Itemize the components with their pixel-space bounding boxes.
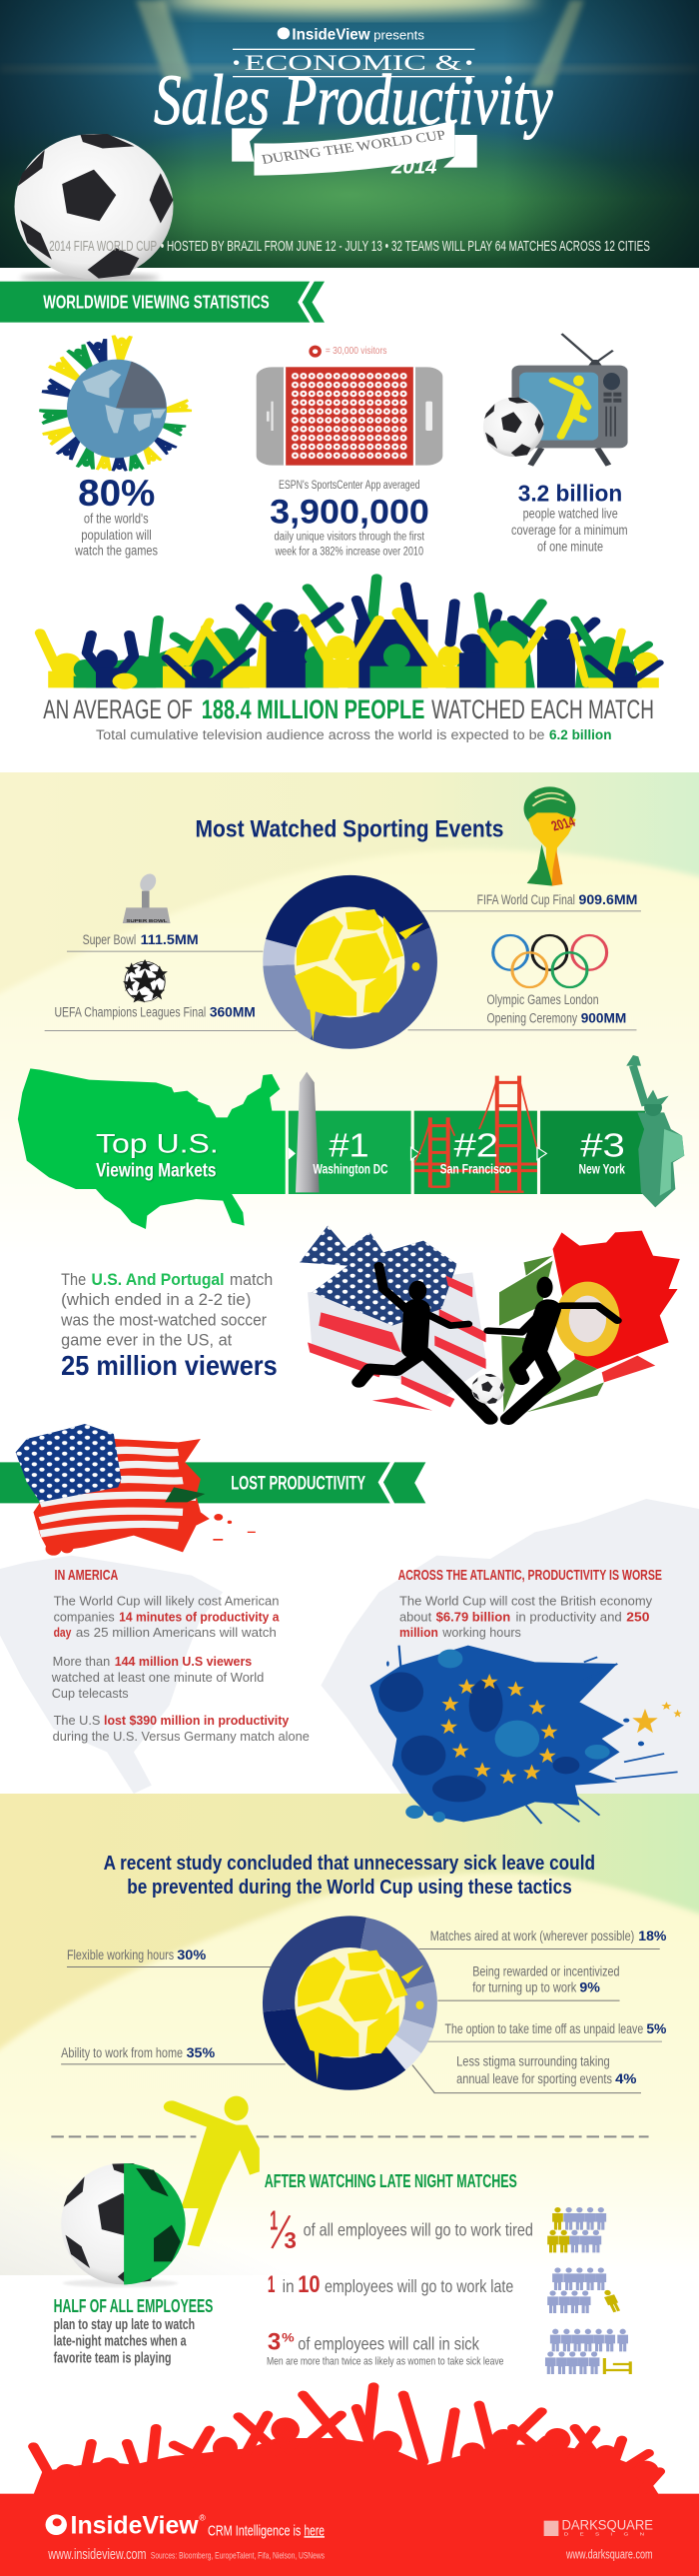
stat: 3.2 billion: 3.2 billion — [518, 481, 622, 507]
callout text: U.S. and Portugal match: was the most-watched soccer — [60, 1311, 267, 1330]
dashed divider — [51, 2133, 649, 2139]
panel: top U.S. viewing markets — [18, 1055, 684, 1419]
label: FIFA World Cup Final: FIFA World Cup Final — [477, 891, 575, 907]
label: flexible working hours: Flexible working hours — [67, 1946, 174, 1962]
panel: sick leave tactics — [61, 1852, 667, 2093]
label: matches aired at work: 18% — [638, 1928, 667, 1943]
label: Olympic Games: Olympic Games London — [487, 991, 599, 1007]
stat: one third tired: 1 — [270, 2205, 278, 2236]
icon: ball between players — [471, 1374, 504, 1404]
map label: Viewing Markets — [96, 1159, 217, 1181]
headline: 188.4 million viewers: AN AVERAGE OF — [43, 693, 193, 724]
icon: half green soccer ball — [61, 2163, 186, 2287]
stat: half of all employees: plan to stay up late to watch — [54, 2315, 195, 2332]
heading — [104, 1852, 595, 1899]
icon: Olympic rings — [493, 935, 607, 987]
stat: half of all employees: late-night matches when a — [54, 2332, 187, 2349]
text block: in America: as 25 million Americans will watch — [76, 1626, 277, 1640]
icon: people one late — [547, 2267, 622, 2313]
panel background: most watched events — [0, 772, 699, 1289]
map label — [96, 1128, 219, 1181]
label: Super Bowl — [67, 931, 263, 952]
world map background — [0, 1499, 699, 1794]
stat: one in ten late: in — [283, 2276, 295, 2296]
banner: lost productivity: LOST PRODUCTIVITY — [231, 1472, 365, 1494]
label: Super Bowl: 111.5MM — [141, 931, 199, 947]
text block: in America: IN AMERICA — [54, 1566, 119, 1583]
panel: after watching late night matches: HALF OF ALL EMPLOYEES — [54, 2295, 213, 2316]
heading: Most Watched Sporting Events — [196, 815, 503, 842]
illustration: two silhouetted players — [358, 1266, 617, 1419]
text block: in America: watched at least one minute of World — [51, 1671, 264, 1685]
stat: 3.2 billion: of one minute — [537, 539, 603, 555]
label: unpaid leave — [428, 2020, 667, 2042]
stat: 3,900,000 visitors: week for a 382% increase over 2010 — [275, 545, 423, 559]
text block: in America: 144 million U.S viewers — [115, 1655, 252, 1669]
label: UEFA Champions League: 360MM — [210, 1004, 256, 1020]
panel: lost productivity — [0, 1424, 699, 1794]
stat: one in ten late: 1 — [268, 2271, 275, 2298]
stat: 80 percent — [74, 474, 158, 559]
callout text: U.S. and Portugal match: match — [230, 1271, 273, 1289]
label: Olympic Games — [407, 991, 637, 1030]
market 1: Washington DC: Washington DC — [313, 1161, 387, 1177]
callout text: U.S. and Portugal match: The — [61, 1271, 86, 1289]
legend: one ball is 30000 visitors: = 30,000 visitors — [326, 345, 387, 357]
ribbon: DURING THE WORLD CUP — [261, 128, 447, 167]
stat: 3,900,000 visitors: 3,900,000 — [270, 492, 429, 531]
label: UEFA Champions League — [45, 1004, 297, 1031]
headline: 188.4 million viewers — [43, 693, 654, 724]
label: UEFA Champions League: UEFA Champions Leagues Final — [54, 1004, 206, 1020]
stat: 80 percent: watch the games — [74, 543, 158, 559]
stat: one in ten late: employees will go to work late — [325, 2276, 513, 2296]
illustration: Portugal flag fragment — [499, 1231, 680, 1412]
footer logo: DarkSquare: DESIGN — [564, 2532, 644, 2537]
market 3: New York: #3 — [580, 1127, 625, 1164]
label: rewarded or incentivized: 9% — [579, 1979, 600, 1995]
stat: 3,900,000 visitors: daily unique visitors through the first — [275, 531, 424, 544]
text block: across the Atlantic: in productivity and — [516, 1610, 622, 1625]
callout text: U.S. and Portugal match: U.S. And Portugal — [92, 1271, 225, 1289]
label: FIFA World Cup Final: 909.6MM — [578, 891, 637, 907]
panel: most watched sporting events — [45, 786, 641, 1049]
illustration: Brazil-coloured crowd — [40, 578, 660, 689]
label: FIFA World Cup Final — [421, 891, 641, 911]
footer logo: DarkSquare: DARKSQUARE — [562, 2517, 653, 2533]
footer logo: InsideView — [46, 2513, 325, 2540]
market 3: New York — [537, 1111, 645, 1194]
stat: one third tired: 3 — [284, 2228, 297, 2253]
market 2: San Francisco — [411, 1076, 537, 1194]
section: worldwide viewing statistics — [38, 334, 660, 742]
illustration: U.S. flag fragment — [300, 1226, 487, 1411]
subheadline: total audience: 6.2 billion — [549, 726, 612, 742]
text block: in America — [51, 1566, 310, 1744]
panel: after watching late night matches — [0, 2096, 699, 2576]
stat: three percent sick — [267, 2329, 503, 2367]
stat: half of all employees: favorite team is playing — [54, 2349, 171, 2366]
footer logo: InsideView: CRM Intelligence is — [208, 2522, 302, 2539]
footer logo: DarkSquare — [544, 2517, 653, 2537]
market 3: New York: New York — [578, 1161, 625, 1177]
text block: in America: day — [54, 1626, 72, 1640]
icon: Statue of Liberty — [626, 1055, 684, 1207]
icon: Super Bowl trophy: SUPER BOWL — [126, 919, 168, 924]
label: flexible working hours: 30% — [177, 1946, 207, 1962]
InsideView presents line: presents — [373, 28, 424, 43]
text block: in America: companies — [54, 1610, 115, 1625]
icon: people one in bed — [545, 2329, 630, 2374]
text block: in America: Cup telecasts — [52, 1687, 129, 1701]
subheadline: total audience: Total cumulative television audience across the world is expected to be — [96, 726, 545, 742]
illustration: red crowd — [33, 2386, 660, 2495]
label: Olympic Games: 900MM — [581, 1010, 626, 1026]
illustration: EU flag paint splatter — [370, 1646, 682, 1824]
label: matches aired at work — [419, 1928, 667, 1949]
text block: across the Atlantic: about — [399, 1610, 432, 1625]
stat: three percent sick: of employees will call in sick — [298, 2334, 479, 2354]
footer links and sources: Sources: Bloomberg, EuropeTalent, Fifa, Nielson, USNews — [151, 2551, 325, 2561]
stat: 3,900,000 visitors — [270, 479, 429, 559]
label: less stigma: 4% — [615, 2070, 637, 2086]
text block: across the Atlantic — [398, 1566, 662, 1640]
label: work from home: Ability to work from home — [61, 2044, 183, 2060]
icon: Super Bowl trophy — [123, 872, 171, 924]
icon: globe ringed by fans — [38, 335, 193, 472]
header fact strip: 2014 FIFA WORLD CUP — [49, 238, 157, 254]
icon: World Cup trophy — [524, 786, 578, 886]
icon: yellow player kicking ball — [172, 2096, 260, 2246]
stat: one third tired — [270, 2205, 533, 2253]
callout text: U.S. and Portugal match: game ever in the US, at — [61, 1331, 233, 1350]
text block: across the Atlantic: 250 — [626, 1610, 650, 1625]
market 2: San Francisco: #2 — [453, 1127, 498, 1164]
panel background: sick leave tactics — [0, 1794, 699, 2308]
text block: in America: The U.S — [54, 1714, 100, 1728]
text block: across the Atlantic: million — [399, 1626, 438, 1640]
text block: in America: lost $390 million in productivity — [104, 1714, 289, 1728]
text block: in America: 14 minutes of productivity a — [119, 1610, 280, 1625]
icon: phone with grid of balls — [257, 367, 442, 466]
label: less stigma — [412, 2053, 641, 2093]
icon: people one third tired — [547, 2207, 606, 2252]
stat: 3,900,000 visitors: ESPN's SportsCenter App averaged — [279, 479, 420, 492]
ribbon — [232, 121, 477, 178]
stat: one in ten late — [268, 2271, 513, 2298]
icon: Champions League starball — [123, 959, 168, 1002]
section banner: worldwide viewing statistics — [0, 282, 325, 323]
stat: one third tired: of all employees will go to work tired — [304, 2219, 533, 2240]
ribbon: 2014 — [390, 156, 437, 178]
footer band — [0, 2494, 699, 2576]
icon: television with ball and player — [483, 334, 628, 466]
label: work from home: 35% — [187, 2044, 215, 2060]
headline: 188.4 million viewers: 188.4 MILLION PEOPLE — [202, 693, 424, 724]
label: unpaid leave: 5% — [646, 2020, 667, 2036]
banner: lost productivity — [0, 1462, 425, 1503]
footer logo: InsideView: ® — [200, 2514, 206, 2523]
section banner: worldwide viewing statistics: WORLDWIDE VIEWING STATISTICS — [43, 291, 270, 313]
stat: 80 percent: 80% — [78, 474, 155, 514]
callout text: U.S. and Portugal match: 25 million viewers — [61, 1350, 278, 1381]
donut chart with paint-splat ball — [263, 875, 437, 1049]
illustration: splattered U.S. flag — [16, 1424, 256, 1556]
stat: three percent sick: 3 — [268, 2329, 281, 2356]
label: Super Bowl: Super Bowl — [83, 931, 136, 947]
stat: one in ten late: 10 — [298, 2271, 321, 2298]
label: rewarded or incentivized — [437, 1963, 620, 2001]
map label: Top U.S. — [96, 1128, 219, 1158]
callout text: U.S. and Portugal match: (which ended in a 2-2 tie) — [61, 1291, 251, 1309]
text block: in America: The World Cup will likely cost American — [54, 1595, 279, 1609]
stat: 3.2 billion — [511, 481, 628, 555]
stat: 3.2 billion: people watched live — [523, 506, 618, 522]
footer logo: InsideView: here — [304, 2522, 325, 2539]
text block: across the Atlantic: working hours — [442, 1626, 521, 1640]
footer links and sources — [48, 2545, 653, 2562]
callout text: U.S. and Portugal match — [60, 1271, 278, 1381]
stat: 80 percent: population will — [81, 527, 152, 543]
market 1: Washington DC — [289, 1072, 411, 1194]
header: stadium background — [0, 0, 699, 270]
InsideView presents line: InsideView — [292, 26, 370, 44]
donut chart with paint-splat ball — [263, 1916, 437, 2090]
market 2: San Francisco: San Francisco — [440, 1161, 511, 1177]
text block: in America: More than — [53, 1655, 110, 1669]
header: soccer ball — [14, 134, 174, 282]
icon: World Cup trophy: 2014 — [549, 813, 578, 834]
Economic and heading: ECONOMIC & — [245, 50, 461, 75]
market 1: Washington DC: #1 — [329, 1127, 369, 1164]
stat: three percent sick: % — [282, 2331, 295, 2345]
header: title lockup — [0, 26, 650, 323]
footer links and sources: www.insideview.com — [48, 2545, 146, 2562]
legend: one ball is 30000 visitors — [309, 345, 387, 358]
stat: 80 percent: of the world's — [84, 511, 149, 527]
stat: three percent sick: Men are more than twice as likely as women to take sick leave — [267, 2355, 503, 2367]
footer logo: InsideView: InsideView — [71, 2513, 199, 2540]
label: rewarded or incentivized: for turning up to work — [472, 1979, 577, 1995]
text block: in America: during the U.S. Versus Germany match alone — [53, 1730, 310, 1744]
text block: across the Atlantic: $6.79 billion — [436, 1610, 510, 1625]
label: Olympic Games: Opening Ceremony — [487, 1010, 578, 1026]
stat: half of all employees — [54, 2295, 213, 2366]
map: United States — [18, 1068, 286, 1229]
